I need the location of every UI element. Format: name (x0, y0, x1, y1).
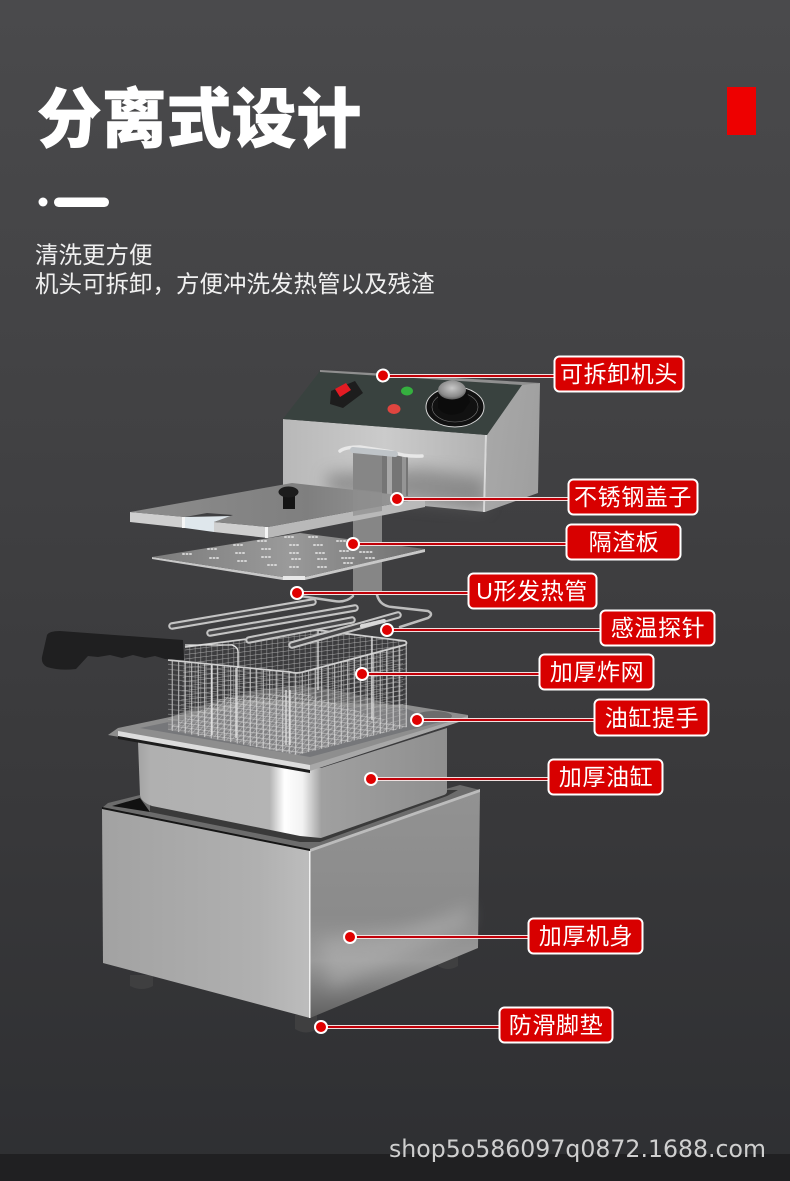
head handle (340, 447, 422, 456)
head front shadow (325, 468, 486, 510)
description text (35, 242, 434, 297)
foot back (438, 955, 458, 969)
body top rim (102, 785, 480, 850)
callout: U tube (291, 574, 596, 608)
body right-face reflection (320, 905, 470, 990)
callout: slag plate: 隔渣板 (589, 529, 659, 555)
callout: U tube: U形发热管 (476, 578, 588, 604)
indicator lights (388, 386, 413, 414)
callout: thick basket: 加厚炸网 (550, 659, 644, 685)
decorative dot and bar (38, 198, 109, 207)
basket handle (42, 631, 184, 670)
frying basket (42, 630, 407, 755)
callout: detachable head (377, 356, 684, 392)
title: 分离式设计 (37, 84, 362, 156)
stainless steel lid (130, 483, 425, 538)
temperature probe (362, 621, 384, 626)
thermostat dial (426, 380, 484, 427)
foot front (295, 1015, 317, 1032)
callout: tank handle: 油缸提手 (605, 705, 699, 731)
lid knob (278, 486, 298, 509)
fryer body base (102, 785, 480, 1032)
oil tank (108, 700, 468, 838)
description text: 机头可拆卸，方便冲洗发热管以及残渣 (35, 271, 434, 297)
fryer control head (283, 370, 540, 594)
callout: anti-slip feet (315, 1008, 612, 1042)
plate perforations (183, 537, 376, 567)
red marker block (727, 87, 756, 135)
shop watermark: shop5o586097q0872.1688.com (389, 1135, 766, 1163)
callout: temperature probe (381, 610, 714, 646)
callout: thick tank: 加厚油缸 (559, 764, 653, 790)
callout: stainless lid (391, 480, 698, 514)
bottom strip (0, 1154, 790, 1181)
callout: detachable head: 可拆卸机头 (560, 361, 678, 387)
icon: rocker switch (330, 381, 363, 408)
callout: thick body: 加厚机身 (539, 923, 633, 949)
callout: thick basket (356, 654, 654, 690)
foot left (130, 975, 153, 989)
tank handle (416, 711, 452, 721)
callout: anti-slip feet: 防滑脚垫 (509, 1012, 603, 1038)
description text: 清洗更方便 (35, 242, 152, 268)
callout: tank handle (411, 700, 708, 736)
support column (353, 452, 408, 594)
tank floor seen through mesh (168, 686, 407, 755)
slag separator plate (152, 533, 425, 580)
callout: temperature probe: 感温探针 (611, 615, 705, 641)
callout: thick body (344, 918, 642, 954)
callout: slag plate (347, 524, 680, 560)
U-shaped heating tube (172, 595, 431, 645)
callout: thick tank (365, 760, 662, 794)
callout: stainless lid: 不锈钢盖子 (574, 484, 692, 510)
